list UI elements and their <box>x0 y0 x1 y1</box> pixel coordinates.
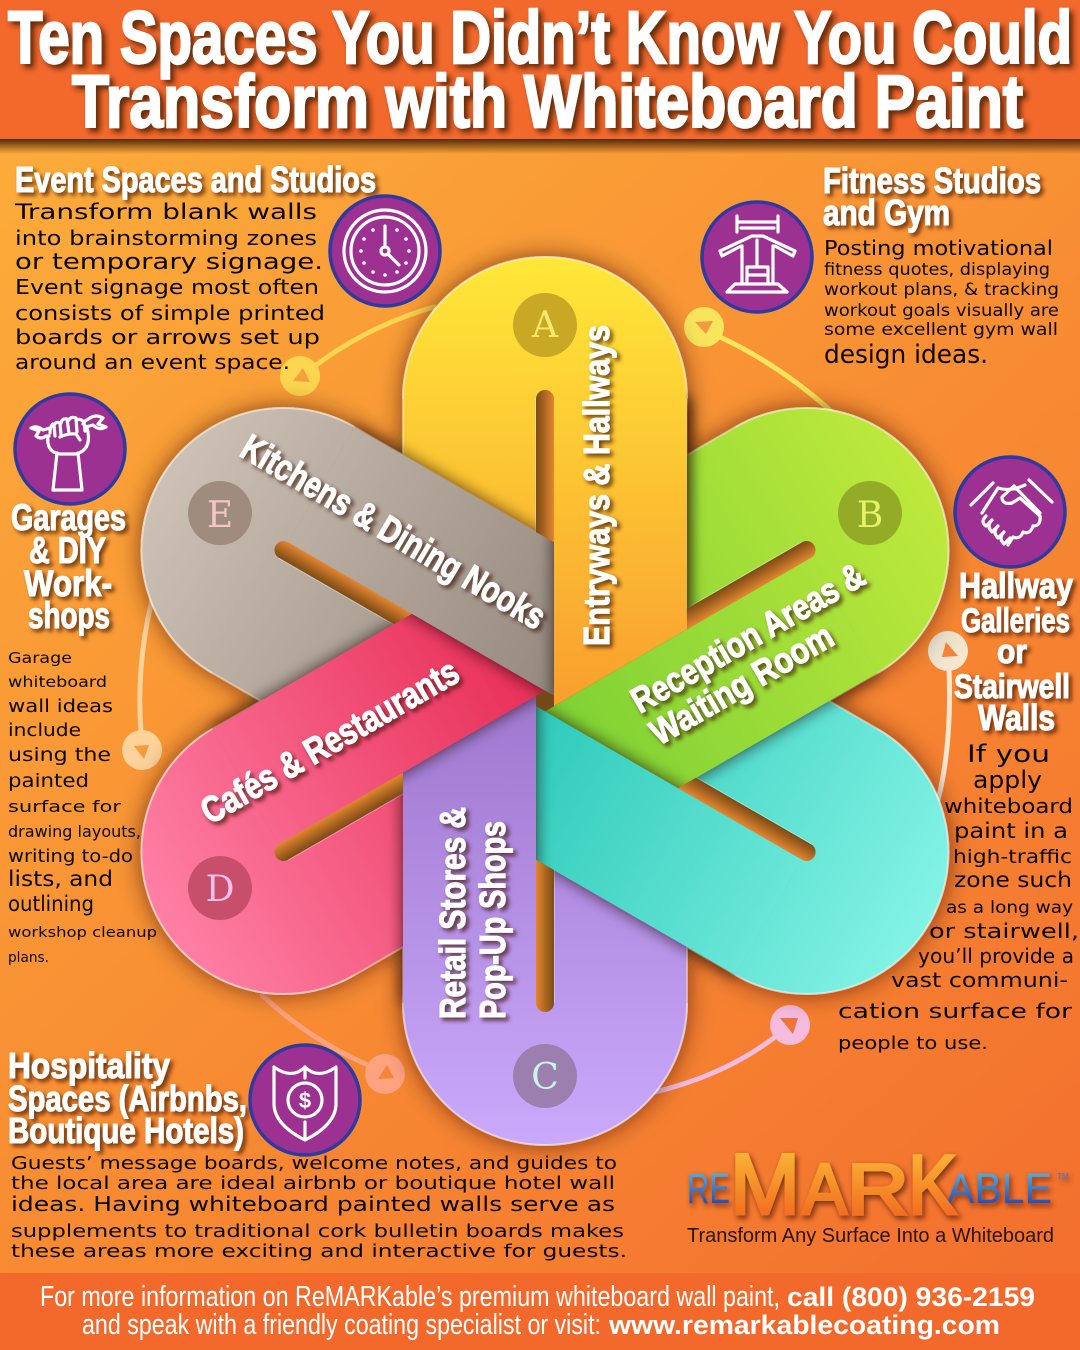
panel: hallway galleries or stairwell walls <box>838 457 1079 1054</box>
body text <box>8 649 157 966</box>
body text: boards or arrows set up <box>15 325 320 349</box>
body text <box>824 236 1059 370</box>
petal labels: Waiting Room <box>642 615 841 753</box>
badge A <box>513 293 577 357</box>
body text: workout goals visually are <box>824 301 1059 321</box>
heading: Hospitality <box>8 1045 170 1086</box>
heading: or <box>997 633 1027 671</box>
body text: using the <box>8 744 111 766</box>
petal labels: Kitchens & Dining Nooks <box>234 427 553 638</box>
body text: outlining <box>8 892 94 916</box>
icon: clock <box>330 196 440 306</box>
heading: Boutique Hotels) <box>8 1110 244 1151</box>
panel: event spaces and studios <box>14 159 440 374</box>
body text: into brainstorming zones <box>15 226 317 250</box>
logo wordmark: R <box>847 1150 909 1230</box>
logo: ReMARKable <box>687 1137 1069 1247</box>
petal labels: Reception Areas & <box>624 554 872 721</box>
badge B: B <box>857 495 883 536</box>
body text: Posting motivational <box>824 236 1053 260</box>
body text: painted <box>8 770 89 792</box>
badge C: C <box>531 1057 559 1098</box>
petals: base layer <box>89 257 1001 1145</box>
logo wordmark: K <box>908 1138 957 1232</box>
heading: Work- <box>24 563 112 604</box>
body text: fitness quotes, displaying <box>824 260 1050 280</box>
footer line one: call (800) 936-2159 <box>787 1282 1035 1312</box>
body text <box>11 1153 627 1262</box>
woven six-petal diagram <box>89 257 1001 1145</box>
heading <box>954 565 1073 738</box>
badge C <box>513 1044 577 1108</box>
logo wordmark <box>687 1137 1069 1233</box>
body text: you’ll provide a <box>918 944 1074 968</box>
petal B: green strip <box>470 357 1000 827</box>
petal labels <box>194 325 872 1019</box>
petal A: yellow strip <box>404 258 687 706</box>
heading <box>823 160 1041 233</box>
icon: gym machine <box>702 202 812 312</box>
body text: Garage <box>8 649 72 667</box>
body text: consists of simple printed <box>15 301 325 325</box>
body text: If you <box>967 740 1050 768</box>
heading <box>11 497 126 636</box>
body text: workout plans, & tracking <box>824 280 1059 300</box>
title <box>8 0 1072 143</box>
petal E: taupe strip <box>91 357 621 826</box>
header band <box>0 0 1080 154</box>
arrow: hospitality <box>262 995 405 1094</box>
icon: handshake <box>955 457 1065 567</box>
body text <box>838 740 1079 1054</box>
body text: Event signage most often <box>15 275 319 299</box>
slots <box>271 390 819 1012</box>
badge B <box>838 481 902 545</box>
body text: the local area are ideal airbnb or boutique hotel wall <box>11 1173 615 1194</box>
footer line two: and speak with a friendly coating specialist or visit: <box>82 1309 601 1341</box>
badge A: A <box>531 305 559 346</box>
body text: paint in a <box>954 819 1068 843</box>
logo wordmark: TM <box>1057 1172 1069 1181</box>
body text: or stairwell, <box>929 919 1079 943</box>
body text: plans. <box>8 950 49 966</box>
logo wordmark: M <box>730 1137 800 1233</box>
body text: apply <box>973 766 1042 794</box>
heading: and Gym <box>823 192 950 233</box>
heading: Walls <box>978 697 1055 738</box>
body text: Guests’ message boards, welcome notes, and guides to <box>11 1153 617 1174</box>
body text: whiteboard <box>944 794 1073 818</box>
badge E <box>188 481 252 545</box>
body text: people to use. <box>838 1033 988 1054</box>
body text: writing to-do <box>8 846 133 867</box>
body text: some excellent gym wall <box>824 320 1058 340</box>
body text: zone such <box>954 868 1072 892</box>
footer line one: For more information on ReMARKable’s premium whiteboard wall paint, <box>40 1281 780 1313</box>
arrow: event spaces <box>280 307 434 396</box>
icon: shield with dollar <box>250 1045 360 1155</box>
body text: these areas more exciting and interactive for guests. <box>11 1241 627 1262</box>
petal D: pink strip <box>90 575 620 1045</box>
body text: whiteboard <box>8 673 107 691</box>
logo wordmark: RE <box>687 1165 730 1213</box>
heading: Garages <box>11 497 126 538</box>
body text <box>14 200 325 374</box>
body text: or temporary signage. <box>15 250 323 275</box>
panel: garages and DIY workshops <box>8 394 157 966</box>
body text: around an event space. <box>15 350 290 374</box>
arrow: retail <box>655 1005 810 1092</box>
rim: cap highlights <box>89 257 1001 1145</box>
footer line two: www.remarkablecoating.com <box>608 1310 1000 1340</box>
body text: ideas. Having whiteboard painted walls serve as <box>11 1192 615 1216</box>
logo tagline: Transform Any Surface Into a Whiteboard <box>687 1225 1054 1247</box>
petal labels: Entryways & Hallways <box>576 325 617 646</box>
petal labels: Pop-Up Shops <box>472 821 513 1019</box>
petal labels: Retail Stores & <box>432 807 473 1019</box>
arrow: fitness <box>684 307 832 412</box>
arrow: hallway galleries <box>928 631 968 800</box>
petal A: yellow strip over taupe <box>404 258 687 706</box>
center hexagon <box>536 691 554 711</box>
connector arcs and arrow badges <box>122 307 968 1094</box>
heading: Event Spaces and Studios <box>15 159 376 200</box>
panel: fitness studios and gym <box>702 160 1059 370</box>
body text: workshop cleanup <box>8 925 157 941</box>
body text: include <box>8 720 81 741</box>
body text: lists, and <box>8 867 113 891</box>
petal labels: Cafés & Restaurants <box>194 651 466 832</box>
body text: design ideas. <box>824 340 988 370</box>
icon: shield with dollar: $ <box>299 1088 311 1113</box>
heading <box>8 1045 247 1151</box>
petal C: purple strip <box>403 696 686 1144</box>
body text: drawing layouts, <box>8 822 141 841</box>
heading: shops <box>28 595 110 636</box>
body text: Transform blank walls <box>14 200 317 224</box>
body text: wall ideas <box>8 696 113 717</box>
heading: Spaces (Airbnbs, <box>8 1078 247 1119</box>
icon: fist with wrench <box>15 394 125 504</box>
arrow: garages <box>122 600 162 770</box>
body text: vast communi- <box>891 968 1068 992</box>
footer band <box>0 1273 1080 1350</box>
logo wordmark: A <box>802 1150 847 1230</box>
body text: surface for <box>8 797 122 816</box>
badge D <box>188 856 252 920</box>
body text: cation surface for <box>838 999 1073 1023</box>
badge E: E <box>207 495 233 536</box>
badge D: D <box>206 869 234 910</box>
heading: & DIY <box>29 530 106 571</box>
body text: as a long way <box>946 898 1073 918</box>
petal: teal strip <box>469 576 999 1045</box>
body text: supplements to traditional cork bulletin boards makes <box>11 1221 624 1242</box>
panel: hospitality spaces <box>8 1045 627 1262</box>
logo wordmark: ABLE <box>947 1165 1052 1213</box>
body text: high-traffic <box>953 846 1072 868</box>
